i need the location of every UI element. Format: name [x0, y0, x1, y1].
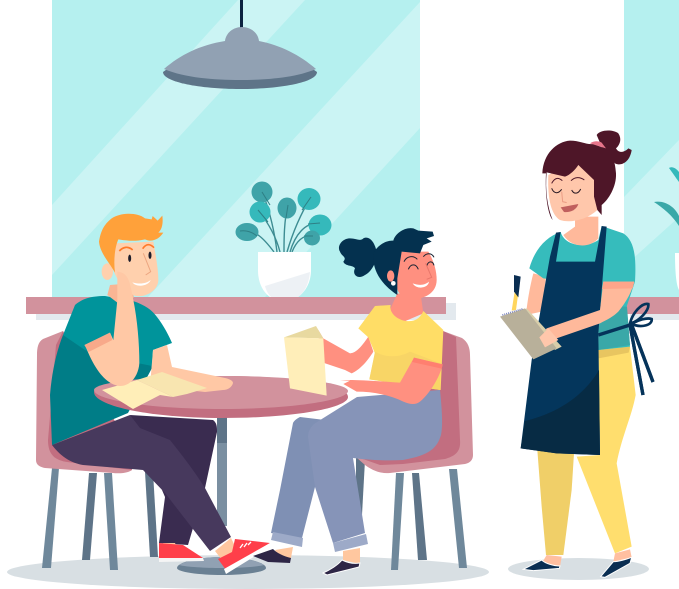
ankles — [542, 549, 632, 567]
man: shirt — [50, 296, 172, 445]
left window — [52, 0, 420, 298]
far shoe — [253, 547, 293, 563]
shoes — [523, 557, 632, 577]
shirt — [358, 305, 443, 390]
far cuff — [271, 532, 303, 547]
hair — [373, 228, 434, 295]
man: legs and shoes — [52, 415, 273, 574]
ear — [102, 263, 113, 280]
bun — [597, 131, 632, 164]
nose — [143, 253, 151, 275]
shirt lower shade — [598, 307, 630, 350]
near shoe — [215, 538, 273, 574]
left chair — [36, 331, 158, 570]
menu — [284, 326, 327, 396]
hand — [539, 328, 558, 347]
ear and earring — [387, 270, 396, 286]
eyebrows — [119, 245, 154, 251]
sleeve shadow — [84, 333, 112, 352]
far leg — [130, 415, 217, 545]
near arm — [340, 358, 443, 404]
far shoe — [159, 543, 204, 562]
far leg — [271, 417, 325, 538]
hair — [99, 214, 163, 273]
neck — [388, 293, 423, 323]
pencil — [512, 275, 521, 311]
far arm — [318, 330, 373, 373]
neck — [563, 217, 598, 245]
shirt shading — [369, 352, 441, 390]
table top — [94, 376, 348, 418]
right window — [624, 0, 679, 298]
mouth — [561, 204, 578, 212]
man: upper body — [84, 214, 233, 409]
face — [113, 242, 158, 296]
chair legs — [42, 468, 158, 570]
potted plant — [236, 182, 332, 297]
floor shadow: waitress — [508, 558, 649, 580]
ponytail — [339, 238, 377, 277]
propping arm and hand — [85, 272, 139, 386]
near cuff — [333, 534, 368, 552]
face — [395, 252, 437, 299]
smile — [132, 280, 151, 286]
apron bow — [598, 304, 652, 335]
apron tails — [630, 324, 653, 395]
waistband shade — [598, 347, 630, 358]
closed eyes, brows and nose — [552, 178, 584, 203]
front arm — [540, 282, 634, 341]
ceiling lamp — [163, 0, 317, 89]
shelf — [26, 297, 679, 320]
woman: legs and shoes — [253, 390, 442, 575]
back leg — [537, 450, 574, 555]
forearm resting on table — [150, 345, 233, 392]
waitress — [500, 131, 653, 577]
apron lower shade — [521, 370, 600, 455]
notebook — [500, 308, 562, 359]
sleeve shadow — [602, 282, 634, 289]
head, neck and propping arm — [84, 214, 163, 386]
face — [548, 163, 597, 221]
apron — [521, 226, 607, 455]
chair legs — [356, 458, 467, 570]
hair — [542, 141, 616, 220]
ear — [597, 180, 606, 196]
front leg — [577, 347, 636, 553]
closed eyes and brows — [404, 254, 434, 269]
near shoe — [323, 548, 360, 575]
back arm — [526, 273, 546, 315]
table pedestal — [177, 410, 266, 575]
eyes — [128, 255, 131, 262]
redraw tails over waist — [630, 324, 653, 395]
hair tie — [590, 141, 606, 148]
smile — [413, 282, 429, 288]
open book — [102, 372, 207, 409]
neck — [107, 283, 134, 303]
right chair — [356, 331, 473, 570]
floor shadow: table group — [7, 555, 489, 589]
near leg — [52, 415, 231, 551]
near leg — [308, 390, 442, 543]
shirt — [529, 226, 635, 350]
woman: upper body — [284, 228, 443, 404]
nose — [426, 263, 432, 279]
sleeve shadow — [412, 358, 443, 369]
decorative plant on right window — [654, 167, 679, 290]
